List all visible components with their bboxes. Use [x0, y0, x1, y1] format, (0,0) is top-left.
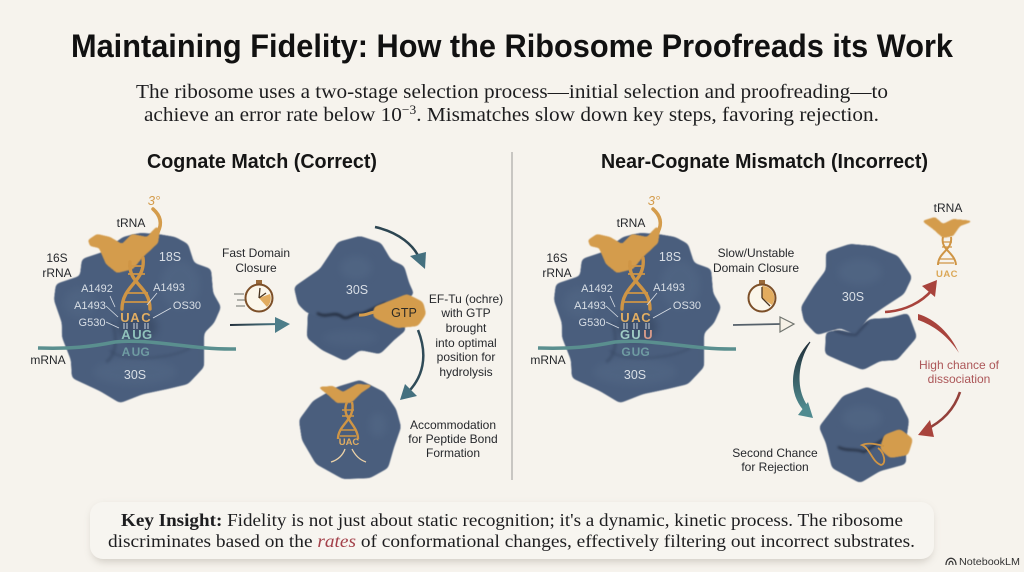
label: accommodation: for Peptide Bond: [408, 432, 498, 446]
panel: cognate match: [30, 193, 503, 479]
ribosome with tRNA: near-cognate: A1493: [574, 300, 606, 312]
subtitle text block: achieve an error rate below 10: [144, 104, 393, 126]
ribosome with tRNA: cognate: 30S: [124, 368, 146, 382]
ribosome with tRNA: cognate: mRNA: [30, 353, 66, 367]
heading: cognate match: Cognate Match (Correct): [147, 151, 377, 173]
ribosome with tRNA: cognate: UAC: [120, 310, 151, 325]
label: high chance of dissociation: High chance of: [919, 358, 1000, 372]
label: second chance: [732, 446, 818, 474]
ribosome open: 30S: [842, 290, 864, 304]
ribosome with tRNA: near-cognate: G: [620, 327, 630, 342]
arrow: second chance: [793, 342, 813, 418]
label: slow domain closure: [713, 246, 799, 275]
ribosome with tRNA: near-cognate: mRNA: [530, 353, 566, 367]
arrow: to unstable state: [733, 317, 794, 332]
label: fast domain closure: [222, 246, 290, 275]
ribosome with tRNA: cognate: AUG: [122, 345, 150, 359]
label: EF-Tu: position for: [437, 350, 495, 364]
arrow: tRNA leaves: [885, 280, 937, 312]
ribosome with tRNA: near-cognate: [530, 193, 736, 403]
callout: key insight: [90, 502, 934, 562]
callout: key insight: Key Insight: Fidelity is not just about static recognition; it's a dynamic, kinetic process. The ribosome: [121, 510, 903, 530]
heading: near-cognate mismatch: Near-Cognate Mismatch (Incorrect): [601, 151, 928, 173]
label: high chance of dissociation: [919, 358, 1000, 386]
ribosome with tRNA: near-cognate: 16S: [546, 251, 568, 265]
ribosome with tRNA: near-cognate: A1492: [581, 283, 613, 295]
arrow: closure to EF-Tu: [375, 227, 426, 269]
ribosome closed with GTP: 30S: [346, 283, 368, 297]
ribosome with tRNA: cognate: A1493: [153, 282, 185, 294]
ribosome with tRNA: near-cognate: U: [643, 327, 653, 342]
ribosome with tRNA: cognate: 3°: [148, 193, 160, 208]
ribosome closed with GTP: [294, 236, 426, 361]
ribosome: accommodation: [299, 380, 401, 479]
ribosome with tRNA: near-cognate: GUG: [621, 345, 650, 359]
label: fast domain closure: Closure: [235, 261, 277, 275]
callout: key insight: discriminates based on the rates of conformational changes, effectively filtering out incorrect substrates.: [108, 531, 915, 551]
ribosome with tRNA: cognate: AUG: [121, 327, 152, 342]
panel: near-cognate mismatch: [530, 193, 1000, 483]
arrow: dissociation to rebinding: [918, 392, 960, 437]
ribosome with tRNA: near-cognate: rRNA: [542, 266, 572, 280]
ribosome with tRNA: near-cognate: G530: [579, 317, 605, 329]
ribosome with tRNA: near-cognate: tRNA: [617, 216, 645, 230]
ribosome with tRNA: cognate: A1493: [74, 300, 106, 312]
icon: fast stopwatch: [234, 280, 272, 312]
ribosome with tRNA: cognate: rRNA: [42, 266, 72, 280]
arrow: high chance top arc: [918, 314, 959, 353]
divider: [512, 152, 513, 480]
ribosome with tRNA: near-cognate: 3°: [648, 193, 660, 208]
ribosome with tRNA: cognate: tRNA: [117, 216, 145, 230]
ribosome with tRNA: near-cognate: 18S: [659, 250, 681, 264]
small dissociated tRNA: UAC: [936, 269, 958, 280]
ribosome: accommodation: UAC: [339, 437, 359, 448]
small dissociated tRNA: tRNA: [934, 201, 962, 215]
ribosome with tRNA: cognate: OS30: [173, 300, 201, 312]
ribosome with tRNA: cognate: [30, 193, 236, 403]
ribosome with bound ochre: [819, 387, 913, 483]
title: Maintaining Fidelity: How the Ribosome Proofreads its Work: [71, 28, 953, 64]
ribosome with tRNA: cognate: 16S: [46, 251, 68, 265]
subtitle text block: The ribosome uses a two-stage selection process—initial selection and proofreading—to: [136, 81, 888, 103]
label: EF-Tu: with GTP: [440, 306, 491, 320]
label: EF-Tu: into optimal: [435, 336, 497, 350]
ribosome with tRNA: near-cognate: OS30: [673, 300, 701, 312]
ribosome with tRNA: near-cognate: UAC: [620, 310, 651, 325]
arrow: to closed state: [230, 317, 290, 333]
logo: NotebookLM: NotebookLM: [959, 556, 1020, 568]
label: slow domain closure: Slow/Unstable: [718, 246, 795, 260]
label: slow domain closure: Domain Closure: [713, 261, 799, 275]
ribosome with tRNA: cognate: A1492: [81, 283, 113, 295]
small dissociated tRNA: [922, 201, 974, 280]
ribosome with tRNA: cognate: 18S: [159, 250, 181, 264]
label: fast domain closure: Fast Domain: [222, 246, 290, 260]
subtitle text block: . Mismatches slow down key steps, favoring rejection.: [416, 104, 879, 126]
label: EF-Tu: brought: [446, 321, 487, 335]
label: EF-Tu: EF-Tu (ochre): [429, 292, 503, 306]
icon: slow stopwatch: [748, 280, 776, 312]
label: second chance: for Rejection: [741, 460, 809, 474]
label: accommodation: Accommodation: [410, 418, 496, 432]
label: EF-Tu: [429, 292, 503, 379]
label: EF-Tu: hydrolysis: [439, 365, 493, 379]
label: accommodation: Formation: [426, 446, 480, 460]
ribosome with tRNA: near-cognate: U: [631, 327, 641, 342]
ribosome with tRNA: near-cognate: 30S: [624, 368, 646, 382]
label: high chance of dissociation: dissociation: [928, 372, 990, 386]
arrow: to accommodation: [400, 330, 423, 400]
ribosome with tRNA: near-cognate: A1493: [653, 282, 685, 294]
label: second chance: Second Chance: [732, 446, 818, 460]
ribosome with tRNA: cognate: G530: [79, 317, 105, 329]
ribosome open: [801, 244, 917, 370]
subtitle text block: −3: [402, 102, 416, 117]
label: accommodation: [408, 418, 498, 460]
subtitle text block: [136, 81, 888, 126]
ribosome closed with GTP: GTP: [391, 306, 417, 320]
